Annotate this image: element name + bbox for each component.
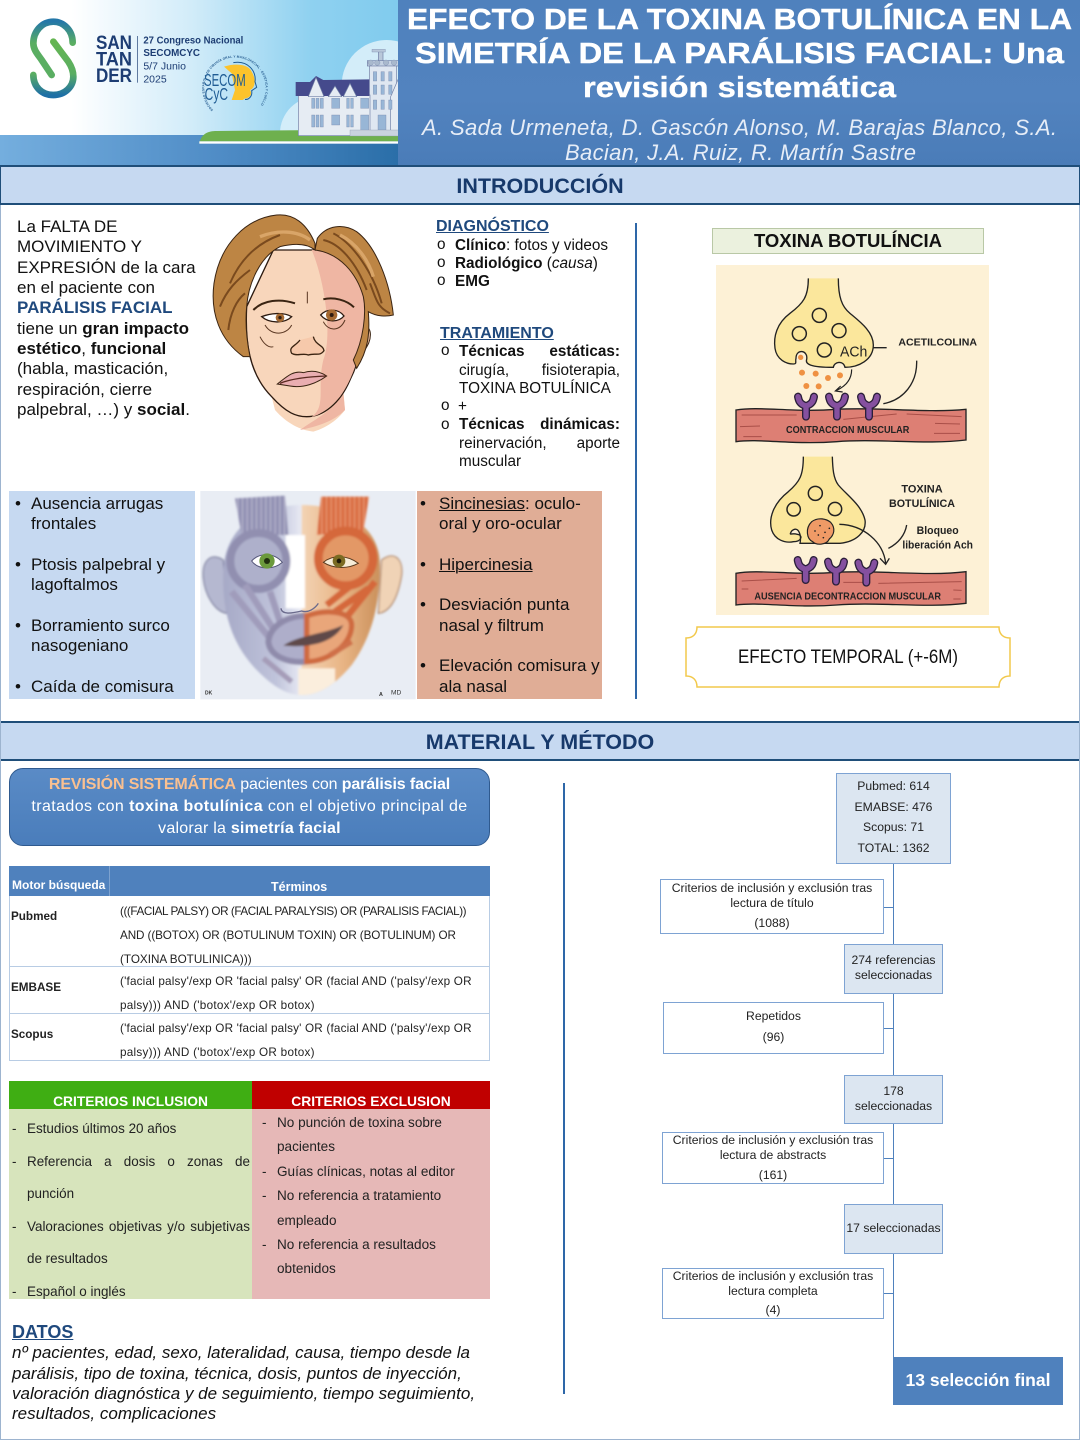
row: embase: palsy))) AND ('botox'/exp OR botox) — [120, 999, 315, 1012]
text: diagnóstico: o — [437, 272, 446, 289]
panel: facial palsy signs: Ausencia arrugas — [31, 494, 163, 513]
title: revisión sistemática — [583, 72, 897, 104]
title: SIMETRÍA DE LA PARÁLISIS FACIAL: Una — [415, 36, 1065, 70]
table header — [9, 866, 490, 896]
text: parálisis facial introduction: La FALTA DE — [17, 217, 117, 236]
heading: inclusion — [9, 1081, 252, 1109]
box: title screening: lectura de título — [730, 896, 814, 910]
box: duplicates: (96) — [763, 1030, 784, 1044]
panel: exclusion criteria: - — [262, 1188, 267, 1203]
panel: facial palsy signs: Caída de comisura — [31, 677, 174, 696]
diagram: panel background — [716, 265, 989, 615]
box: 17 selected — [844, 1204, 943, 1254]
congress wordmark — [96, 33, 243, 87]
flowchart: study selection — [660, 773, 1063, 1405]
box: abstract screening: Criterios de inclusión y exclusión tras — [673, 1133, 873, 1147]
box: abstract screening: lectura de abstracts — [720, 1148, 826, 1162]
text: diagnóstico: EMG — [455, 273, 490, 290]
panel: exclusion criteria: No punción de toxina sobre — [277, 1115, 442, 1130]
divider: method column — [563, 783, 565, 1394]
panel: facial palsy signs — [9, 491, 195, 699]
SECOM CyC logo: CyC — [205, 84, 228, 104]
box: abstract screening — [662, 1132, 884, 1184]
text: data collected: resultados, complicaciones — [12, 1404, 216, 1423]
congress wordmark: SAN — [96, 33, 132, 54]
diagram: acetylcholine muscle contraction: ACETILCOLINA — [898, 338, 978, 349]
box: databases: Scopus: 71 — [863, 820, 924, 834]
panel: facial palsy signs: • — [15, 677, 21, 696]
text: tratamiento — [440, 325, 620, 470]
box: 178 selected: seleccionadas — [855, 1099, 932, 1113]
box: databases: EMABSE: 476 — [855, 800, 932, 814]
text: parálisis facial introduction: PARÁLISIS FACIAL — [17, 298, 173, 317]
panel: inclusion criteria: - — [12, 1121, 16, 1136]
panel: exclusion criteria: - — [262, 1115, 267, 1130]
congress wordmark: TAN — [96, 49, 132, 70]
box: 274 selected: seleccionadas — [855, 968, 932, 982]
callout: systematic review aim: REVISIÓN SISTEMÁTICA pacientes con parálisis facial — [49, 776, 450, 793]
box: 274 selected: 274 referencias — [851, 953, 936, 967]
panel: complications — [417, 491, 602, 699]
text: parálisis facial introduction: palpebral, …) y social. — [17, 400, 190, 419]
diagram: acetylcholine muscle contraction: ACh — [840, 345, 867, 361]
panel: facial palsy signs: Ptosis palpebral y — [31, 555, 165, 574]
diagram: acetylcholine muscle contraction — [735, 278, 978, 444]
row: pubmed: (TOXINA BOTULINICA))) — [120, 953, 252, 966]
box: 178 selected: 178 — [883, 1084, 904, 1098]
header: title panel — [398, 0, 1080, 165]
text: tratamiento: reinervación, aporte — [459, 435, 620, 452]
congress wordmark: 27 Congreso Nacional — [143, 36, 243, 47]
row: pubmed: AND ((BOTOX) OR (BOTULINUM TOXIN) OR (BOTULINUM) OR — [120, 929, 456, 942]
illustration: facial muscles: MD — [391, 689, 402, 696]
text: diagnóstico: DIAGNÓSTICO — [436, 218, 549, 235]
congress wordmark: 5/7 Junio — [143, 61, 186, 72]
divider: intro column — [635, 223, 637, 699]
panel: inclusion criteria — [9, 1081, 252, 1299]
diagram: botulinum toxin blocks release: liberación Ach — [902, 539, 973, 551]
text: parálisis facial introduction: MOVIMIENTO Y — [17, 237, 142, 256]
table header: Términos — [271, 880, 327, 894]
clouds — [342, 40, 432, 130]
heading: exclusion: CRITERIOS EXCLUSION — [291, 1094, 451, 1109]
box: full text screening: lectura completa — [728, 1284, 818, 1298]
box: 178 selected — [844, 1075, 943, 1124]
heading: material y método — [0, 721, 1080, 761]
box: abstract screening: (161) — [759, 1168, 787, 1182]
callout: temporal effect: EFECTO TEMPORAL (+-6M) — [738, 647, 958, 668]
row: scopus: Scopus — [11, 1028, 53, 1041]
text: data collected: DATOS — [12, 1322, 73, 1342]
heading: introducción — [0, 165, 1080, 205]
bottom band — [0, 135, 400, 170]
panel: exclusion criteria — [252, 1081, 490, 1299]
panel: exclusion criteria: empleado — [277, 1213, 336, 1228]
illustration: facial muscles — [200, 491, 416, 700]
panel: exclusion criteria: obtenidos — [277, 1261, 336, 1276]
text: parálisis facial introduction: respiración, cierre — [17, 380, 152, 399]
panel: complications: Hipercinesia — [439, 555, 533, 574]
text: tratamiento: TOXINA BOTULÍNICA — [459, 380, 611, 397]
connector lines — [893, 864, 894, 1358]
illustration: face with facial palsy — [212, 214, 394, 432]
palace — [296, 49, 400, 136]
box: duplicates: Repetidos — [746, 1009, 801, 1023]
panel: inclusion criteria: Referencia a dosis o zonas de — [27, 1154, 250, 1168]
row: embase: EMBASE — [11, 981, 61, 994]
text: parálisis facial introduction: tiene un gran impacto — [17, 319, 189, 338]
illustration: facial muscles: DK — [205, 690, 213, 696]
panel: exclusion criteria: No referencia a resultados — [277, 1237, 436, 1252]
callout: systematic review aim — [9, 768, 490, 846]
panel: complications: Elevación comisura y — [439, 656, 600, 675]
diagram: botulinum toxin blocks release: TOXINA — [901, 484, 943, 496]
congress wordmark: DER — [96, 66, 132, 87]
box: full text screening: Criterios de inclusión y exclusión tras — [673, 1269, 873, 1283]
text: tratamiento: cirugía, fisioterapia, — [459, 362, 620, 379]
panel: complications: • — [420, 595, 426, 614]
text: parálisis facial introduction: estético, funcional — [17, 339, 166, 358]
row: embase: ('facial palsy'/exp OR 'facial palsy' OR (facial AND ('palsy'/exp OR — [120, 975, 472, 988]
box: 17 selected: 17 seleccionadas — [846, 1221, 941, 1235]
SECOM CyC logo: SECOM — [204, 70, 246, 90]
panel: exclusion criteria: No referencia a tratamiento — [277, 1188, 441, 1203]
callout: temporal effect — [685, 626, 1011, 688]
panel: inclusion criteria: - — [12, 1218, 16, 1234]
row: pubmed: Pubmed — [11, 910, 57, 923]
illustration: facial muscles: A — [379, 692, 383, 698]
authors: A. Sada Urmeneta, D. Gascón Alonso, M. Barajas Blanco, S.A. — [420, 115, 1057, 140]
text: tratamiento: o — [441, 342, 450, 359]
box: full text screening — [662, 1268, 884, 1319]
text: tratamiento: TRATAMIENTO — [440, 325, 554, 342]
box: duplicates — [663, 1002, 884, 1054]
panel: complications: • — [420, 656, 426, 675]
text: data collected: valoración diagnóstica y de seguimiento, tiempo seguimiento, — [12, 1384, 475, 1403]
box: final selection — [893, 1357, 1063, 1405]
box: databases: Pubmed: 614 — [857, 779, 930, 793]
panel: inclusion criteria: Estudios últimos 20 años punción de resultados — [27, 1121, 176, 1266]
text: diagnóstico: o — [437, 254, 446, 271]
row: embase — [10, 967, 489, 1014]
panel: complications: ala nasal — [439, 677, 507, 696]
text: tratamiento: muscular — [459, 453, 521, 470]
row: scopus: ('facial palsy'/exp OR 'facial palsy' OR (facial AND ('palsy'/exp OR — [120, 1022, 472, 1035]
panel: exclusion criteria: pacientes — [277, 1139, 335, 1154]
panel: inclusion criteria: Valoraciones objetivas y/o subjetivas — [27, 1218, 250, 1234]
box: databases — [836, 773, 951, 864]
panel: inclusion criteria: - — [12, 1284, 16, 1298]
box: full text screening: (4) — [766, 1303, 780, 1317]
text: tratamiento: Técnicas dinámicas: — [459, 416, 620, 433]
heading: toxina botulínica: TOXINA BOTULÍNCIA — [754, 230, 942, 251]
title: EFECTO DE LA TOXINA BOTULÍNICA EN LA — [407, 2, 1072, 36]
text: diagnóstico: Radiológico (causa) — [455, 255, 598, 272]
text: diagnóstico: o — [437, 236, 446, 253]
panel: exclusion criteria: Guías clínicas, notas al editor — [277, 1164, 455, 1179]
table: search terms — [9, 866, 490, 1061]
panel: complications: • — [420, 555, 426, 574]
panel: complications: • — [420, 494, 426, 513]
panel: inclusion criteria: Español o inglés — [27, 1284, 126, 1298]
SECOM CyC logo: SOCIEDAD ESPAÑOLA DE CIRUGÍA ORAL Y MAXILOFACIAL · ESTÉTICA Y CUELLO — [202, 55, 268, 112]
authors — [420, 115, 1057, 165]
row: scopus: palsy))) AND ('botox'/exp OR botox) — [120, 1046, 315, 1059]
heading: material y método: MATERIAL Y MÉTODO — [426, 730, 654, 754]
text: tratamiento: o — [441, 397, 450, 414]
heading: exclusion — [252, 1081, 490, 1109]
text: parálisis facial introduction — [17, 217, 196, 419]
authors: Bacian, J.A. Ruiz, R. Martín Sastre — [565, 140, 916, 165]
text: parálisis facial introduction: en el paciente con — [17, 278, 155, 297]
panel: facial palsy signs: frontales — [31, 514, 96, 533]
box: title screening: (1088) — [754, 916, 790, 930]
panel: facial palsy signs: • — [15, 616, 21, 635]
congress wordmark: 2025 — [143, 74, 167, 85]
box: title screening — [660, 879, 884, 934]
congress wordmark: SECOMCYC — [143, 48, 201, 59]
text: data collected: nº pacientes, edad, sexo, lateralidad, causa, tiempo desde la — [12, 1343, 470, 1362]
diagram: botulinum toxin blocks release — [735, 456, 973, 607]
box: final selection: 13 selección final — [906, 1370, 1050, 1390]
page frame lines — [0, 205, 1, 1440]
panel: facial palsy signs: • — [15, 555, 21, 574]
logo S — [33, 22, 73, 95]
heading: introducción: INTRODUCCIÓN — [456, 174, 624, 198]
diagram: acetylcholine muscle contraction: CONTRACCION MUSCULAR — [786, 425, 910, 436]
panel: facial palsy signs: • — [15, 494, 21, 513]
text: tratamiento: + — [458, 398, 467, 415]
callout: systematic review aim: tratados con toxina botulínica con el objetivo principal de — [31, 798, 468, 815]
row: pubmed — [10, 896, 489, 967]
table header: Motor búsqueda — [12, 878, 105, 892]
panel: exclusion criteria: - — [262, 1164, 267, 1179]
box: 274 selected — [844, 944, 943, 994]
diagram: botulinum toxin blocks release: AUSENCIA DECONTRACCION MUSCULAR — [754, 591, 941, 602]
diagram: botulinum toxin blocks release: Bloqueo — [917, 525, 959, 537]
panel: complications: Desviación punta — [439, 595, 569, 614]
text: data collected: parálisis, tipo de toxina, técnica, dosis, puntos de inyección, — [12, 1364, 462, 1383]
callout: systematic review aim: valorar la simetría facial — [158, 820, 341, 837]
panel: inclusion criteria: - — [12, 1154, 16, 1168]
text: data collected — [12, 1322, 475, 1423]
panel: complications: oral y oro-ocular — [439, 514, 562, 533]
heading: toxina botulínica — [712, 228, 984, 254]
row: pubmed: (((FACIAL PALSY) OR (FACIAL PARALYSIS) OR (PARALISIS FACIAL)) — [120, 905, 466, 918]
panel: facial palsy signs: nasogeniano — [31, 636, 128, 655]
panel: complications: nasal y filtrum — [439, 616, 544, 635]
heading: inclusion: CRITERIOS INCLUSION — [53, 1094, 208, 1109]
text: tratamiento: o — [441, 416, 450, 433]
title — [407, 2, 1072, 104]
text: tratamiento: Técnicas estáticas: — [459, 343, 620, 360]
header: congress banner — [0, 0, 398, 165]
text: diagnóstico: Clínico: fotos y videos — [455, 237, 608, 254]
text: parálisis facial introduction: EXPRESIÓN de la cara — [17, 258, 196, 277]
box: databases: TOTAL: 1362 — [857, 840, 930, 854]
panel: facial palsy signs: Borramiento surco — [31, 616, 170, 635]
panel: complications: Sincinesias: oculo- — [439, 494, 581, 513]
panel: facial palsy signs: lagoftalmos — [31, 575, 118, 594]
box: title screening: Criterios de inclusión y exclusión tras — [672, 881, 872, 895]
text: parálisis facial introduction: (habla, masticación, — [17, 359, 168, 378]
row: scopus — [11, 1022, 472, 1059]
text: diagnóstico — [436, 216, 608, 290]
diagram: botulinum toxin blocks release: BOTULÍNICA — [889, 497, 955, 510]
panel: exclusion criteria: - — [262, 1237, 267, 1252]
